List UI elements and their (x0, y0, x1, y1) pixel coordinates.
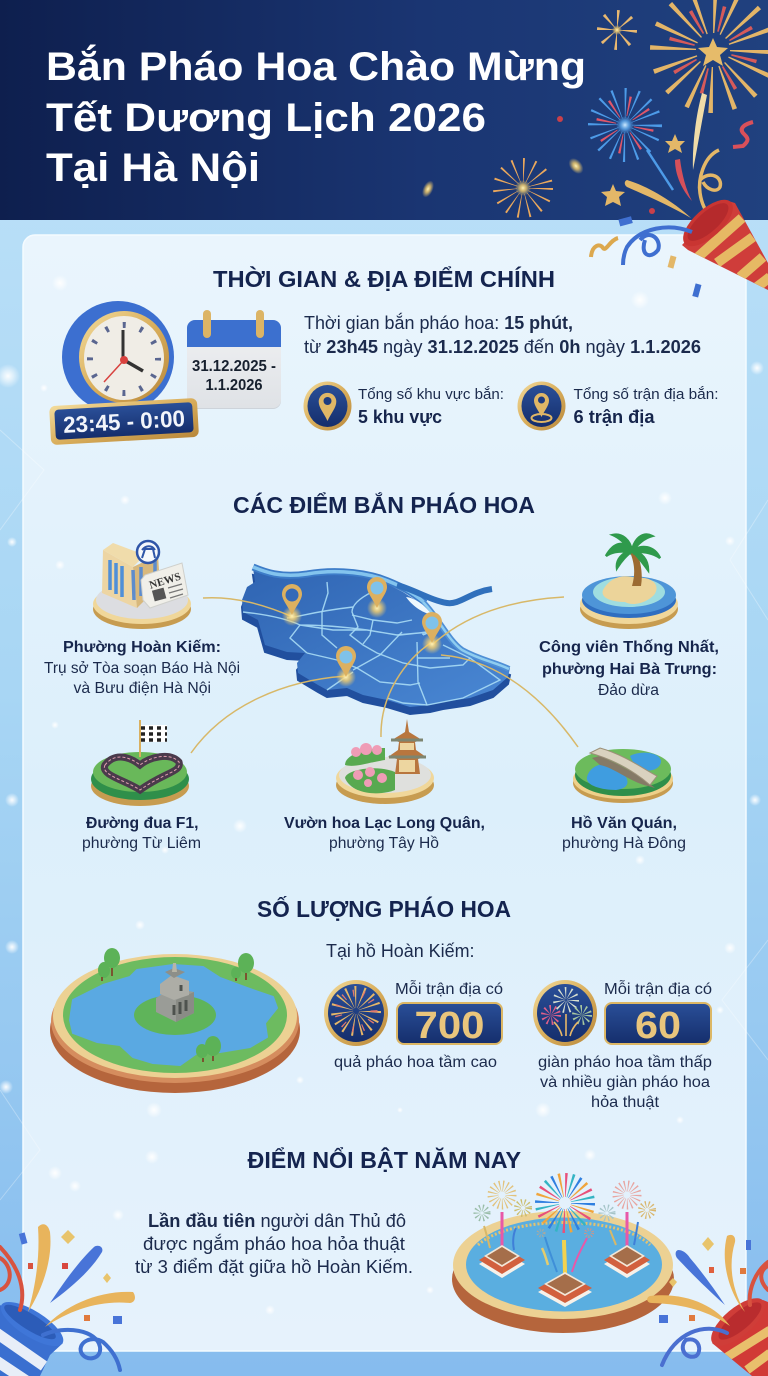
stat: khu vực: 5 khu vực (358, 407, 442, 427)
time badge: 23:45 - 0:00 (62, 405, 186, 438)
title: Bắn Pháo Hoa Chào Mừng (46, 43, 586, 89)
icon: calendar: 1.1.2026 (206, 377, 263, 394)
icon: F1 track (91, 720, 189, 806)
stat: 700: quả pháo hoa tầm cao (334, 1054, 497, 1071)
stat: 60: 60 (635, 1005, 681, 1047)
stat: 700: Mỗi trận địa có (395, 979, 503, 998)
label: Phường Hoàn Kiếm: Phường Hoàn Kiếm: (63, 639, 221, 656)
label: Đường đua F1: phường Từ Liêm (82, 835, 201, 852)
heading: SỐ LƯỢNG PHÁO HOA (257, 895, 511, 922)
label: Vườn hoa Lạc Long Quân: phường Tây Hồ (329, 835, 439, 852)
label: Công viên Thống Nhất: Đảo dừa (598, 682, 659, 699)
icon: newspaper building: NEWS (148, 571, 182, 592)
icon: bridge (573, 748, 673, 803)
time description (304, 312, 701, 357)
stat: 700: 700 (414, 1005, 484, 1047)
stat: khu vực (358, 386, 504, 427)
connector arcs (191, 597, 578, 753)
title (46, 43, 586, 190)
label: Đường đua F1: Đường đua F1, (86, 815, 198, 832)
bokeh sparkles (0, 275, 764, 1315)
stat: 60: Mỗi trận địa có (604, 979, 712, 998)
stat: trận địa: Tổng số trận địa bắn: (574, 386, 718, 403)
firework streaks (625, 93, 707, 218)
section: điểm nổi bật (135, 1146, 674, 1333)
time description: từ 23h45 ngày 31.12.2025 đến 0h ngày 1.1.2026 (304, 337, 701, 357)
stat: 60 (538, 979, 712, 1111)
icon: pagoda garden (336, 719, 434, 804)
stat: 700 (334, 979, 503, 1071)
highlight text: từ 3 điểm đặt giữa hồ Hoàn Kiếm. (135, 1257, 413, 1277)
map pins (282, 577, 442, 687)
highlight text (135, 1211, 413, 1277)
header fireworks (420, 10, 753, 217)
icon: low fireworks (533, 980, 597, 1046)
label: Hồ Văn Quán (562, 815, 686, 852)
label: Tại hồ Hoàn Kiếm: Tại hồ Hoàn Kiếm: (326, 941, 474, 961)
star: firework center (698, 38, 728, 66)
title: Tết Dương Lịch 2026 (46, 96, 486, 140)
bottom left party popper (0, 1224, 135, 1376)
icon: newspaper building (93, 541, 191, 629)
label: Phường Hoàn Kiếm: và Bưu điện Hà Nội (74, 680, 211, 697)
label: Đường đua F1 (82, 815, 201, 852)
stat: trận địa (574, 386, 718, 427)
section: số lượng pháo hoa (50, 895, 712, 1111)
label: Phường Hoàn Kiếm: Trụ sở Tòa soạn Báo Hà Nội (44, 660, 240, 677)
top right party popper (591, 192, 768, 298)
label: Vườn hoa Lạc Long Quân: Vườn hoa Lạc Long Quân, (284, 815, 485, 832)
time description: Thời gian bắn pháo hoa: 15 phút, (304, 312, 573, 333)
label: Công viên Thống Nhất: phường Hai Bà Trưng: (542, 661, 717, 678)
label: Công viên Thống Nhất: Công viên Thống Nhất, (539, 639, 719, 656)
illustration: Hoàn Kiếm lake (50, 948, 300, 1093)
stat: trận địa: 6 trận địa (574, 407, 655, 427)
label: Vườn hoa Lạc Long Quân (284, 815, 485, 852)
stat: 60: hỏa thuật (591, 1094, 660, 1111)
time badge (49, 398, 199, 445)
icon: high firework (324, 980, 388, 1046)
label: Công viên Thống Nhất (539, 639, 719, 699)
title: Tại Hà Nội (46, 146, 260, 190)
icon: pin 1 (304, 382, 352, 430)
highlight text: được ngắm pháo hoa hỏa thuật (143, 1233, 405, 1254)
stat: 60: và nhiều giàn pháo hoa (540, 1074, 710, 1091)
label: Hồ Văn Quán: phường Hà Đông (562, 835, 686, 852)
section: thời gian & địa điểm (49, 265, 719, 445)
stars and confetti (557, 116, 685, 214)
section: các điểm bắn pháo hoa (44, 491, 719, 852)
stat: khu vực: Tổng số khu vực bắn: (358, 386, 504, 403)
bottom right party popper (647, 1235, 768, 1376)
icon: pin 2 (518, 382, 566, 430)
icon: palm island (580, 535, 678, 629)
icon: calendar (187, 310, 281, 409)
label: Phường Hoàn Kiếm (44, 639, 240, 697)
icon: clock (62, 301, 174, 413)
illustration: lake with fireworks (452, 1185, 674, 1333)
heading: ĐIỂM NỔI BẬT NĂM NAY (248, 1146, 521, 1173)
highlight text: Lần đầu tiên người dân Thủ đô (148, 1211, 406, 1231)
heading: THỜI GIAN & ĐỊA ĐIỂM CHÍNH (213, 265, 555, 292)
stat: 60: giàn pháo hoa tầm thấp (538, 1054, 712, 1071)
header banner (0, 0, 768, 220)
icon: calendar: 31.12.2025 - (192, 358, 276, 375)
label: Hồ Văn Quán: Hồ Văn Quán, (571, 815, 677, 832)
map of Hanoi (242, 567, 510, 714)
heading: CÁC ĐIỂM BẮN PHÁO HOA (233, 491, 535, 518)
content panel (23, 235, 746, 1351)
